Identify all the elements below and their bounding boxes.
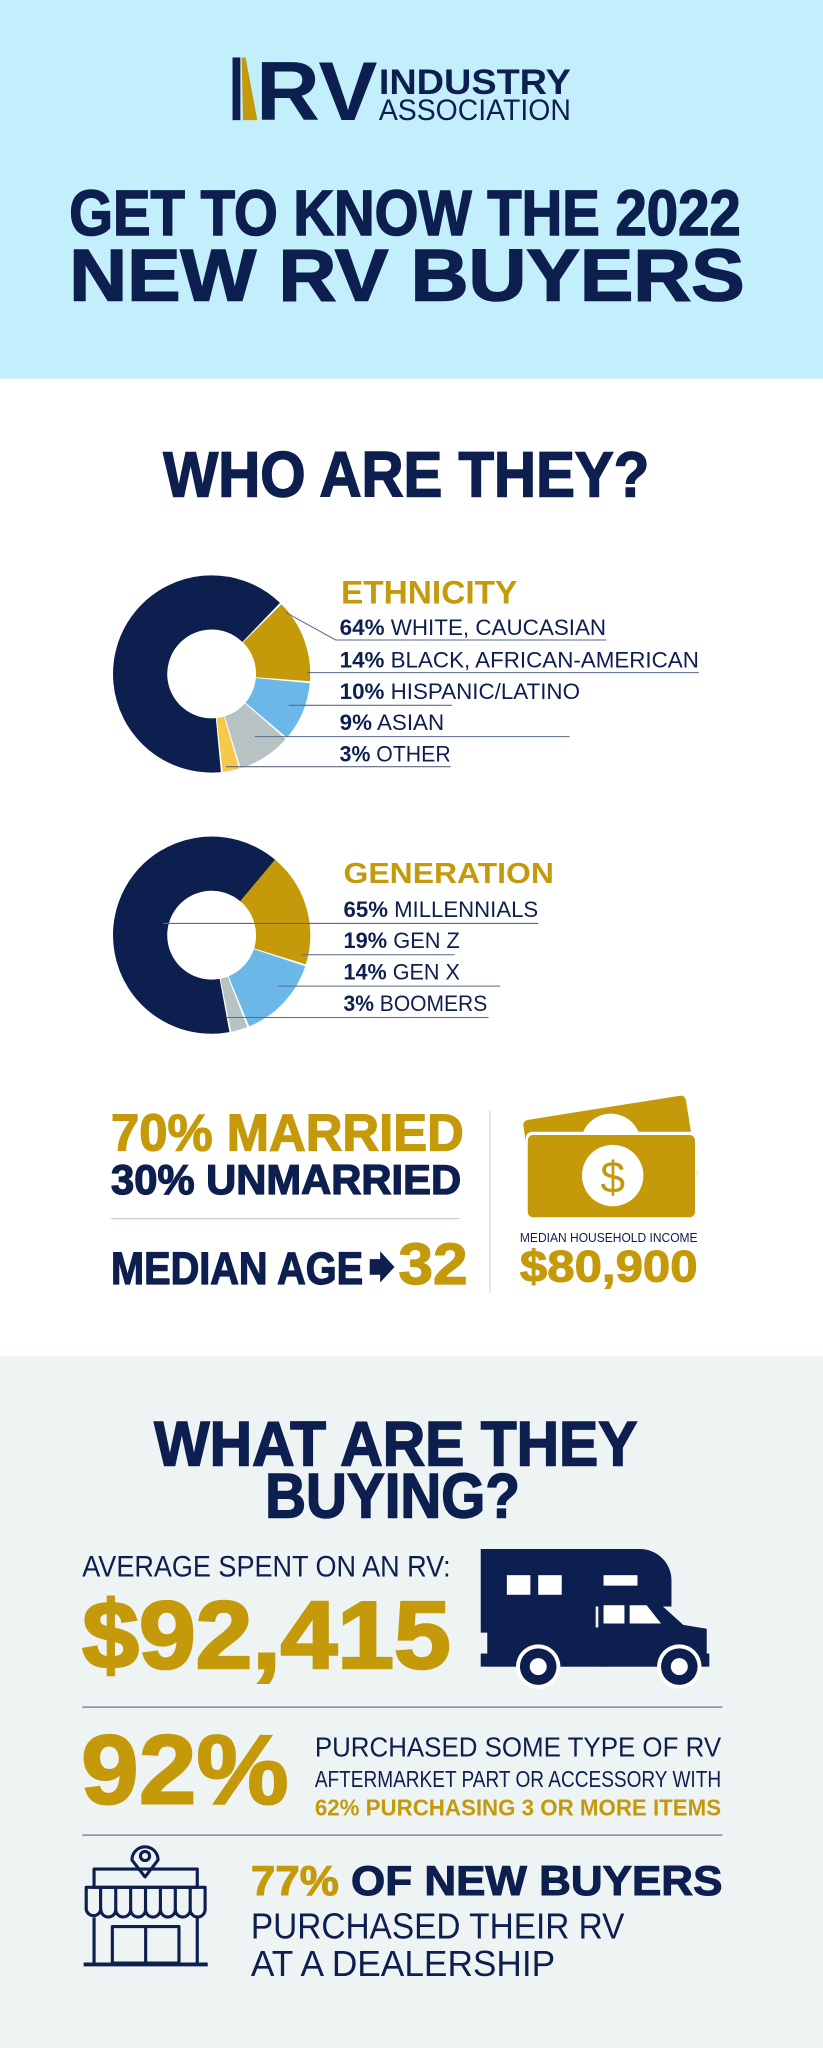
- ethnicity legend: ETHNICITY: [341, 573, 518, 610]
- generation donut chart: [111, 834, 312, 1036]
- accessory stat: 92%: [81, 1715, 289, 1825]
- ethnicity donut chart: [110, 573, 313, 775]
- marital status stats: 70% MARRIED: [111, 1105, 464, 1163]
- heading: what are they buying: [154, 1409, 637, 1532]
- average spent: AVERAGE SPENT ON AN RV:: [82, 1550, 451, 1583]
- accessory stat: [81, 1715, 722, 1825]
- median age: 32: [398, 1232, 468, 1297]
- title: GET TO KNOW THE 2022: [69, 177, 741, 249]
- dealership stat: PURCHASED THEIR RV: [251, 1905, 625, 1946]
- dealership stat: AT A DEALERSHIP: [251, 1943, 555, 1984]
- generation legend: [163, 858, 554, 1017]
- accessory stat: AFTERMARKET PART OR ACCESSORY WITH: [315, 1766, 721, 1792]
- median household income: $80,900: [520, 1242, 698, 1291]
- ethnicity legend: 64% WHITE, CAUCASIAN: [340, 615, 606, 640]
- icon: RV camper: [481, 1549, 709, 1689]
- generation legend: 3% BOOMERS: [344, 991, 487, 1016]
- logo: RV Industry Association: INDUSTRY: [379, 63, 571, 102]
- heading: who are they: WHO ARE THEY?: [163, 438, 649, 510]
- median age: MEDIAN AGE: [111, 1243, 363, 1294]
- icon: money bills: [523, 1095, 698, 1219]
- generation legend: 14% GEN X: [344, 960, 460, 985]
- ethnicity legend: 10% HISPANIC/LATINO: [340, 679, 580, 704]
- title: NEW RV BUYERS: [69, 235, 745, 316]
- dealership stat: 77% OF NEW BUYERS: [251, 1857, 722, 1904]
- average spent: $92,415: [82, 1583, 451, 1689]
- generation legend: 65% MILLENNIALS: [344, 897, 538, 922]
- marital status stats: [111, 1105, 464, 1203]
- median household income: MEDIAN HOUSEHOLD INCOME: [520, 1230, 698, 1245]
- ethnicity legend: [226, 573, 699, 767]
- logo: RV Industry Association: RV: [256, 44, 378, 138]
- logo: RV Industry Association: [233, 44, 571, 138]
- marital status stats: 30% UNMARRIED: [111, 1156, 461, 1203]
- ethnicity legend: 9% ASIAN: [340, 710, 444, 735]
- icon: dealership store: [84, 1847, 208, 1964]
- ethnicity legend: 14% BLACK, AFRICAN-AMERICAN: [340, 647, 699, 672]
- ethnicity legend: 3% OTHER: [340, 741, 451, 766]
- icon: money bills: $: [600, 1153, 625, 1202]
- generation legend: 19% GEN Z: [344, 928, 460, 953]
- dealership stat: [251, 1857, 722, 1984]
- heading: what are they buying: BUYING?: [265, 1462, 520, 1532]
- accessory stat: 62% PURCHASING 3 OR MORE ITEMS: [315, 1795, 721, 1821]
- header background: [0, 0, 823, 379]
- generation legend: GENERATION: [344, 858, 554, 890]
- logo: RV Industry Association: ASSOCIATION: [379, 94, 571, 127]
- title: [69, 177, 745, 316]
- accessory stat: PURCHASED SOME TYPE OF RV: [315, 1732, 722, 1763]
- median age: [111, 1232, 468, 1297]
- heading: what are they buying: WHAT ARE THEY: [154, 1409, 637, 1479]
